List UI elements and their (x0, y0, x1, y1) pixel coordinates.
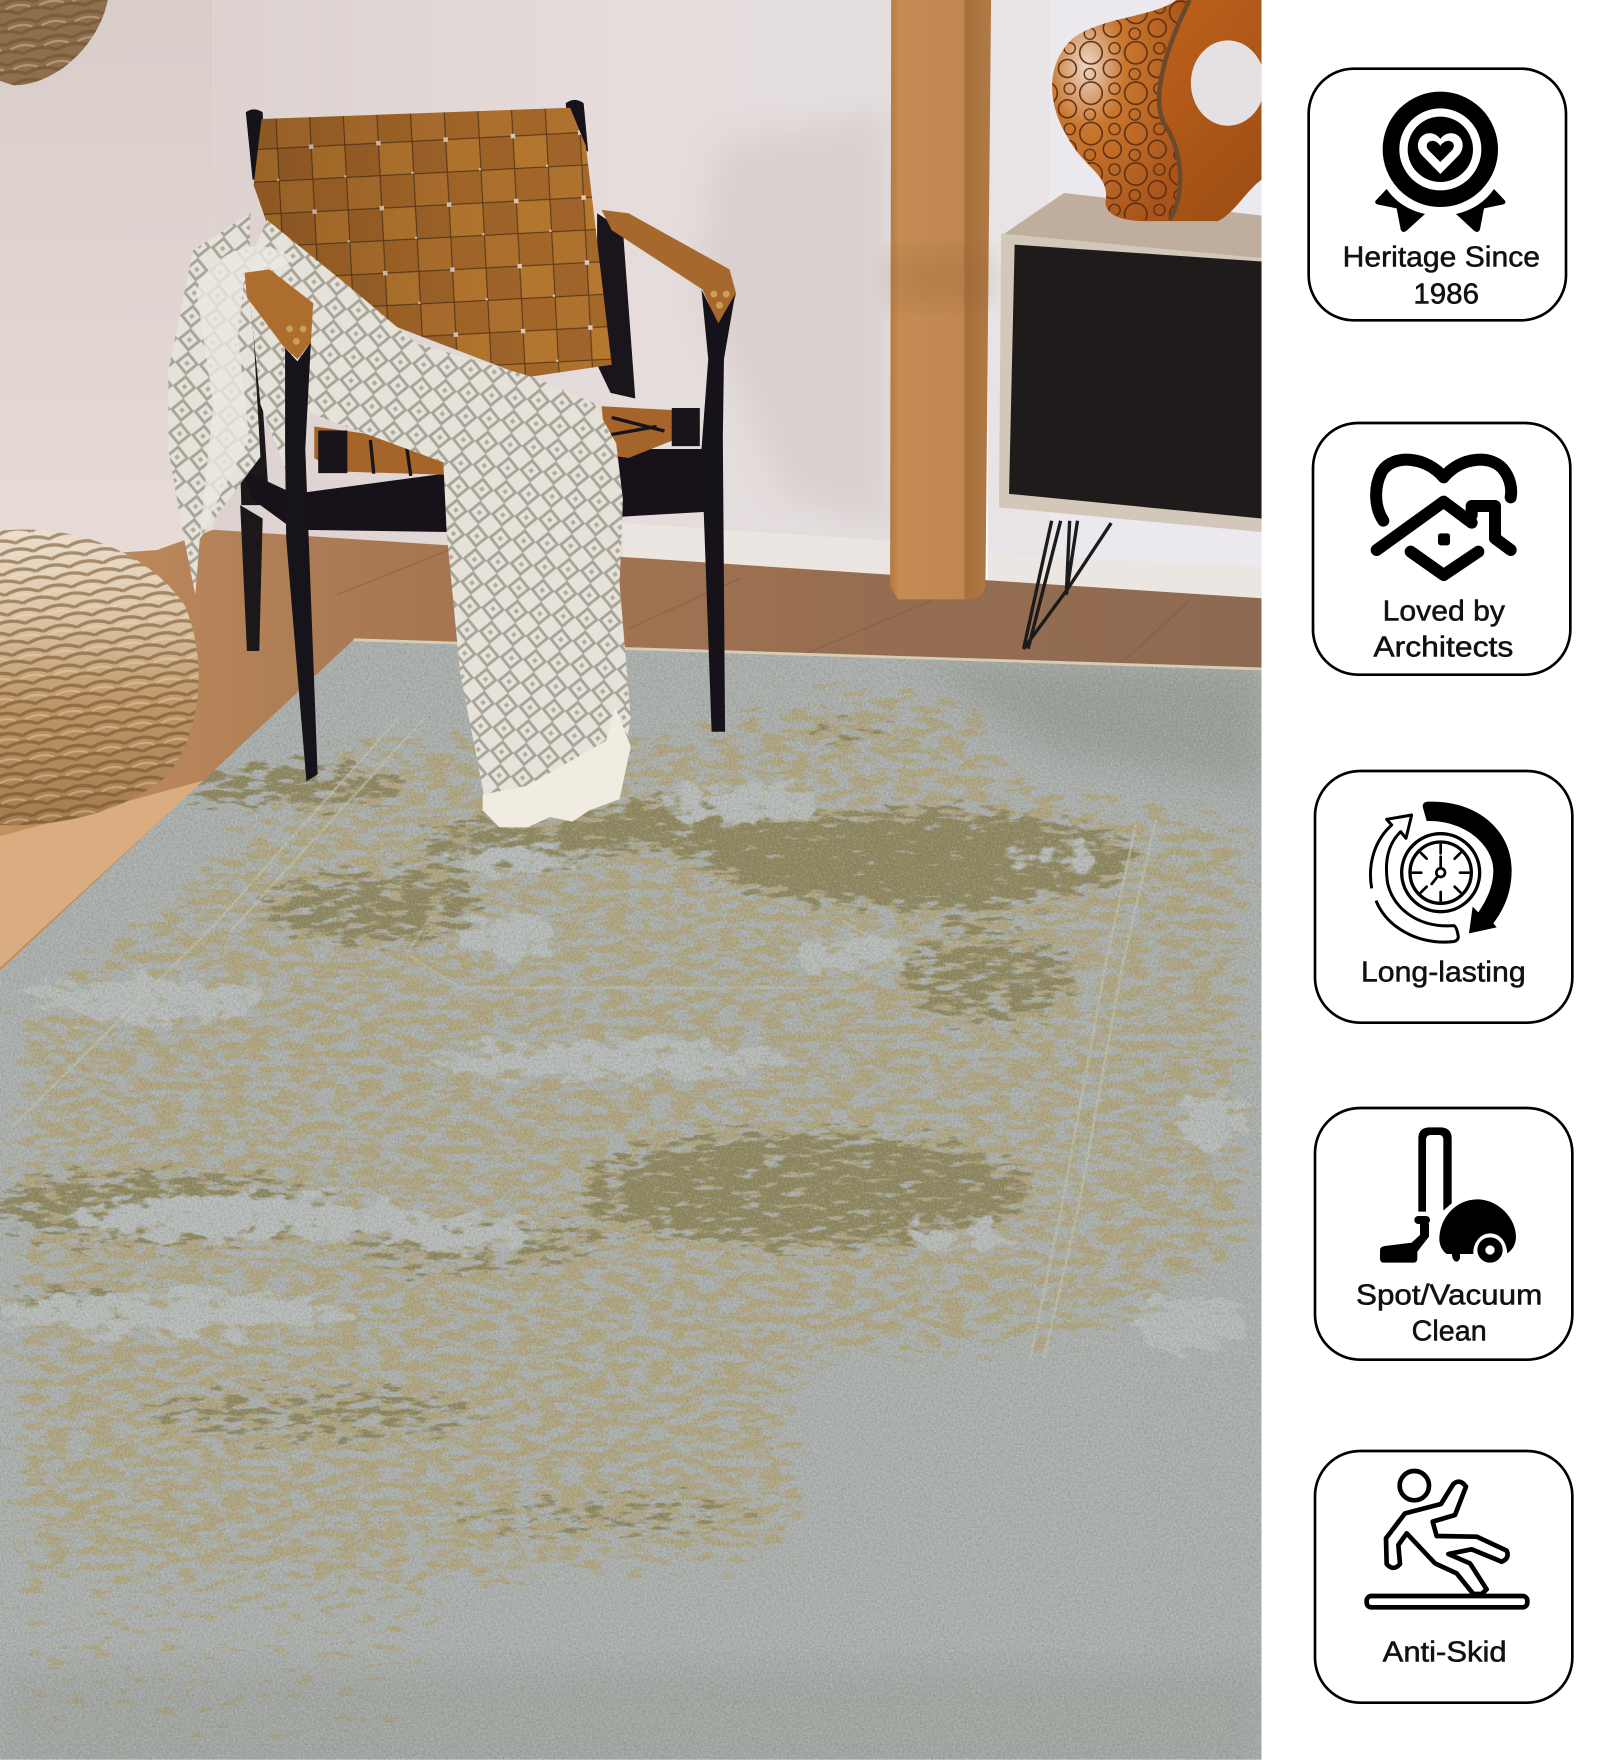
rug dark olive pattern (0, 709, 1145, 1549)
throw fringe (483, 707, 631, 827)
label (1356, 1279, 1542, 1348)
back shading (254, 108, 612, 377)
chair seat frame (241, 449, 709, 532)
chair back right support (597, 213, 635, 398)
badge: Loved by Architects (1313, 423, 1570, 675)
rug light grain (0, 629, 1262, 1760)
icon: slipping person (1367, 1471, 1527, 1607)
throw drape (245, 220, 631, 799)
wall basket (0, 0, 108, 85)
seat leather (314, 406, 694, 475)
throw highlight fold (196, 246, 294, 537)
wooden post (890, 0, 991, 599)
rug tan pattern (0, 673, 1262, 1760)
orange vase (1052, 0, 1265, 221)
label: Loved by (1383, 596, 1506, 628)
rug border lines (11, 718, 1156, 1358)
rug fringe (354, 640, 1262, 669)
right front leg (702, 290, 735, 732)
icon: rosette with heart (1375, 100, 1505, 232)
label: Long-lasting (1361, 957, 1526, 989)
badge frame (1313, 423, 1570, 675)
throw left fold (168, 213, 260, 595)
left arm brass studs (290, 329, 303, 341)
label: Architects (1373, 632, 1513, 664)
label (1343, 242, 1540, 310)
rug medallion outline (406, 915, 898, 988)
badge frame (1315, 1108, 1572, 1360)
wall shadow (696, 112, 887, 528)
chair rear leg (240, 505, 263, 651)
rug shadow top right (920, 662, 1262, 786)
badge: Anti-Skid (1315, 1451, 1572, 1703)
rug base (0, 629, 1262, 1760)
baseboard (623, 523, 1262, 599)
armchair (168, 100, 736, 827)
chair back posts (246, 100, 588, 180)
floor plank lines (337, 550, 1190, 662)
badge frame (1309, 69, 1566, 320)
wall (0, 0, 1263, 606)
wood floor (0, 530, 1262, 1010)
post shadow band (892, 253, 988, 303)
sideboard (999, 193, 1262, 649)
floor sunlight (0, 780, 203, 968)
woven pouf (0, 529, 199, 825)
badge frame (1315, 771, 1572, 1023)
label: Heritage Since (1343, 242, 1540, 274)
right arm brass studs (714, 294, 726, 305)
icon: vacuum cleaner (1380, 1127, 1516, 1263)
seat straps (320, 410, 698, 476)
icon: clock with circular arrows (1370, 802, 1512, 942)
woven leather back (254, 108, 612, 377)
label: Spot/Vacuum (1356, 1279, 1542, 1311)
rug lower shadow (0, 1672, 1262, 1760)
badge: Long-lasting (1315, 771, 1572, 1023)
badge frame (1315, 1451, 1572, 1703)
left arm leather (245, 269, 313, 359)
white side panel background (1262, 0, 1600, 1760)
label (1373, 596, 1513, 664)
chair rear left post (236, 303, 269, 505)
rug dark grain (0, 629, 1262, 1760)
badge: Spot/Vacuum Clean (1315, 1108, 1572, 1360)
left front leg (285, 342, 318, 781)
label: Clean (1412, 1316, 1487, 1348)
rug (0, 629, 1262, 1760)
throw behind arm (249, 291, 309, 471)
badge: Heritage Since 1986 (1309, 69, 1566, 320)
rug light patches (0, 776, 1257, 1358)
label: 1986 (1413, 278, 1479, 310)
label: Anti-Skid (1383, 1637, 1507, 1669)
right arm leather (602, 210, 736, 326)
icon: heart and house (1376, 460, 1511, 575)
room photo (0, 0, 1265, 1760)
